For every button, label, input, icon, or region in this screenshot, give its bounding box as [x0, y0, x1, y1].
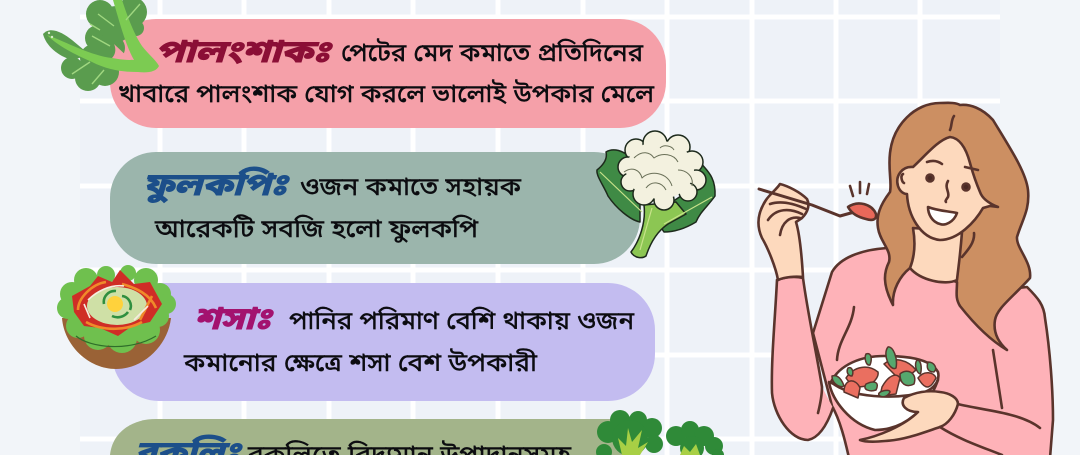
- face: [897, 137, 998, 240]
- fork: [759, 189, 858, 216]
- eyes and nose: [926, 174, 934, 182]
- text: spinach line 2: খাবারে পালংশাক যোগ করলে ভালোই উপকার মেলে: [118, 79, 655, 108]
- hair: [878, 103, 1030, 350]
- text: cucumber line 2: কমানোর ক্ষেত্রে শসা বেশ উপকারী: [183, 348, 537, 377]
- icon: cauliflower: [597, 131, 715, 258]
- text: cauliflower line 1: ওজন কমাতে সহায়ক: [300, 173, 522, 201]
- text: cauliflower line 2: আরেকটি সবজি হলো ফুলকপি: [154, 214, 479, 243]
- bowl: [829, 380, 938, 430]
- panel: spinach: [110, 19, 666, 128]
- tomato: [848, 203, 876, 220]
- panel: cauliflower: [110, 152, 640, 264]
- text: spinach line 1: পেটের মেদ কমাতে প্রতিদিনের: [341, 38, 644, 67]
- right arm: [940, 350, 1040, 455]
- icon: spinach leaves: [43, 0, 159, 91]
- heading: cucumber: শসাঃ: [194, 301, 274, 336]
- text: cucumber line 1: পানির পরিমাণ বেশি থাকায় ওজন: [289, 306, 635, 335]
- left sleeve: [772, 277, 833, 440]
- panel: broccoli: [110, 419, 640, 455]
- icon: salad bowl: [57, 265, 176, 369]
- icon: broccoli: [596, 410, 724, 455]
- panel: cucumber: [112, 283, 655, 401]
- smile: [928, 207, 957, 225]
- neck: [910, 228, 962, 282]
- sleeve outline: [772, 277, 854, 440]
- heading: cauliflower: ফুলকপিঃ: [143, 167, 290, 203]
- salad in bowl: [832, 347, 936, 398]
- hand holding bowl: [860, 391, 958, 442]
- body: [813, 248, 1053, 455]
- illustration: woman eating salad: [759, 103, 1053, 455]
- heading: spinach: পালংশাকঃ: [155, 34, 333, 69]
- raised hand: [759, 184, 808, 280]
